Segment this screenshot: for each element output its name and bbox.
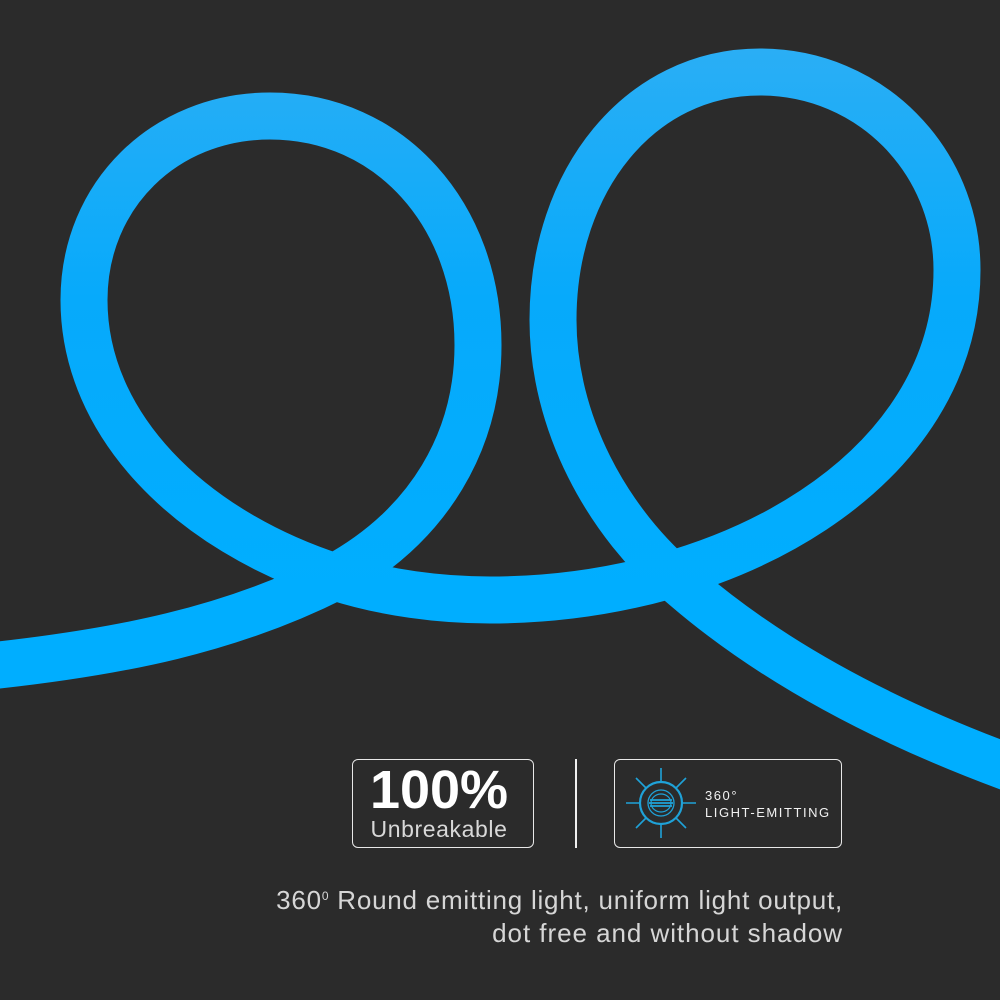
badge: 100% Unbreakable: [352, 759, 534, 848]
icon caption: 360°: [705, 788, 738, 803]
icon: radiating light: [626, 768, 696, 838]
description text: dot free and without shadow: [492, 918, 843, 948]
description text: [276, 885, 843, 948]
badge number: 100%: [370, 760, 508, 820]
badge: 360 light-emitting: [614, 759, 842, 848]
badge label: Unbreakable: [370, 816, 508, 842]
vertical divider: [575, 759, 576, 848]
icon caption: LIGHT-EMITTING: [705, 805, 831, 820]
icon caption: [705, 788, 831, 820]
description text: 3600 Round emitting light, uniform light output,: [276, 885, 843, 915]
